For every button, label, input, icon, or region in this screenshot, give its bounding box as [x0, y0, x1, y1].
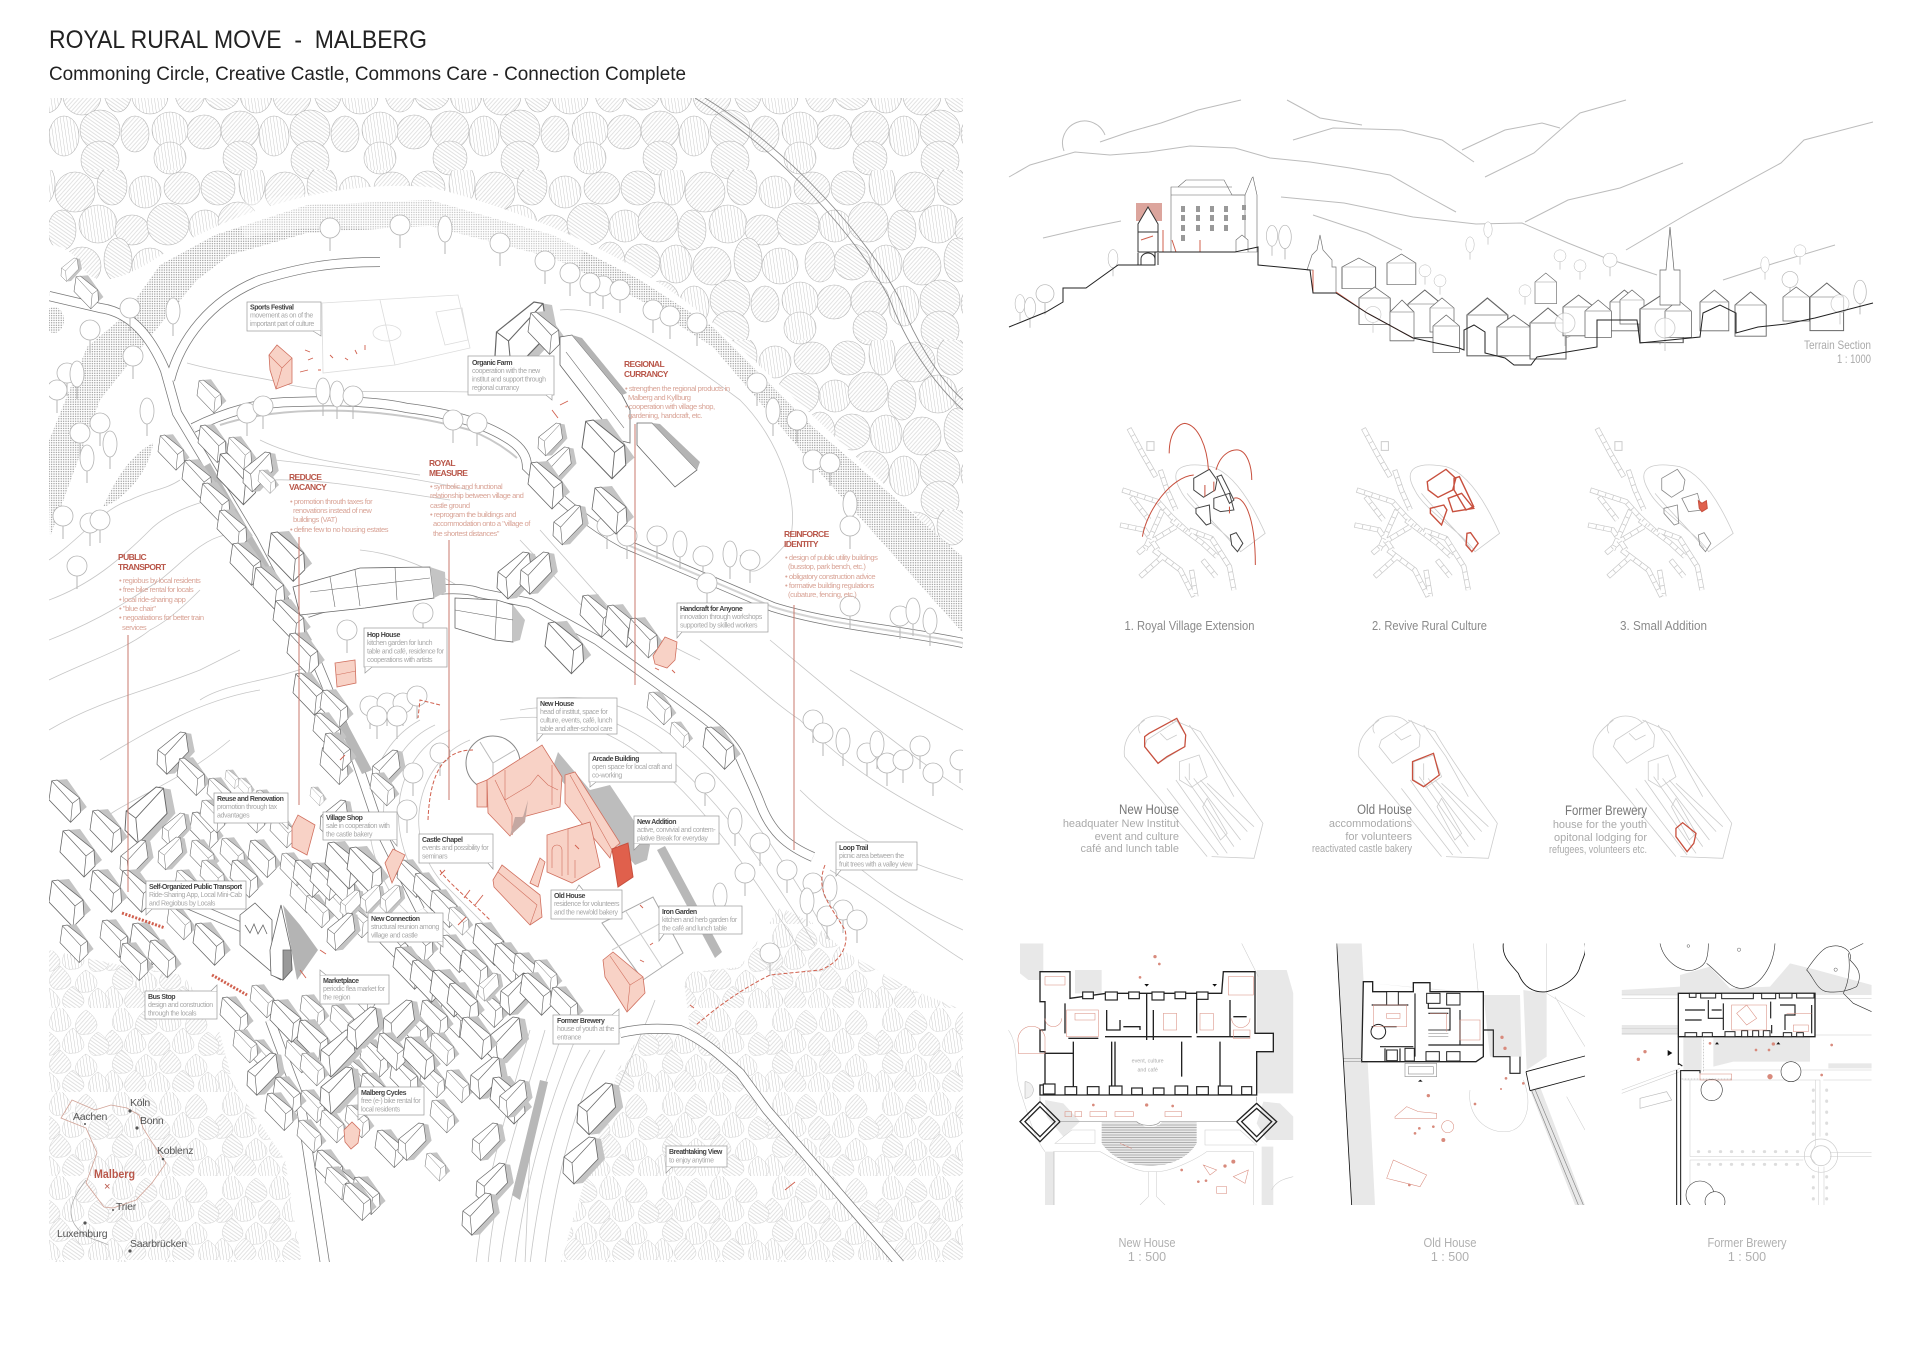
diagram 2: revive rural culture: [1354, 428, 1500, 597]
red leader lines: [128, 424, 794, 892]
strategy: royal measure: [429, 458, 531, 538]
callout: handcraft for anyone: innovation through workshops: [680, 614, 763, 621]
strategy: reinforce identity: • design of public utility buildings: [785, 553, 878, 562]
contour lines: [49, 310, 963, 1264]
title: ROYAL RURAL MOVE - MALBERG: [49, 26, 427, 54]
Hop House building: [335, 660, 356, 687]
callout: arcade building: [589, 753, 676, 787]
gate tower: [1307, 235, 1336, 293]
strategy: royal measure: • symbolic and functional: [430, 482, 503, 491]
callout: former brewery: entrance: [557, 1034, 582, 1042]
callout: new addition: [634, 816, 719, 850]
strategy: reduce vacancy: • promotion throuth taxes for: [290, 497, 373, 506]
red roof block and new house section: [1136, 203, 1200, 265]
callout: handcraft for anyone: Handcraft for Anyone: [680, 606, 743, 613]
callout: hop house: [364, 628, 447, 673]
panel: concept diagrams: [1063, 423, 1733, 858]
section tree overlays: [1365, 295, 1849, 351]
buildings: north meadow and upper village: [61, 258, 741, 769]
strategy: royal measure: relationship between village and: [430, 491, 524, 500]
callout: hop house: cooperations with artists: [367, 657, 433, 664]
callout: marketplace: periodic flea market for: [323, 986, 386, 993]
new house text: New House: [1119, 802, 1179, 817]
strategy: regional currancy: gardening, handcraft, etc.: [628, 411, 703, 420]
plan caption: old house: [1424, 1236, 1477, 1264]
callout: arcade building: Arcade Building: [592, 756, 639, 763]
old house text: accommodations: [1329, 818, 1412, 830]
plan caption: old house: Old House: [1424, 1236, 1477, 1250]
strategy: public transport: TRANSPORT: [118, 562, 167, 572]
callout: castle chapel: seminars: [422, 854, 448, 860]
red activity marks and trails: [300, 345, 795, 1190]
callout: former brewery: [553, 1009, 619, 1044]
plan caption: former brewery: Former Brewery: [1708, 1236, 1787, 1250]
roads: [49, 98, 963, 1264]
plan caption: new house: 1 : 500: [1128, 1250, 1166, 1264]
strategy: reduce vacancy: REDUCE: [289, 472, 322, 482]
callout: sports festival: movement as on of the: [250, 312, 313, 320]
callout: new addition: New Addition: [637, 819, 676, 826]
locator map: Trier: [116, 1201, 137, 1213]
locator map: Malberg: [94, 1169, 135, 1181]
strategy: royal measure: accommodation onto a "village of: [433, 519, 531, 528]
callout: marketplace: the region: [323, 994, 351, 1002]
Village Shop building: [292, 815, 315, 855]
New Addition: [612, 843, 633, 887]
callout: old house: [551, 885, 622, 919]
section caption: Terrain Section: [1804, 338, 1871, 352]
callout: new connection: village and castle: [371, 932, 418, 940]
section houses: [1342, 227, 1844, 359]
callout: malberg cycles: local residents: [361, 1106, 401, 1114]
callout: new house: culture, events, café, lunch: [540, 718, 613, 724]
new house text: headquater New Institut: [1063, 818, 1179, 830]
old house text: for volunteers: [1345, 831, 1412, 843]
callout: bus stop: through the locals: [148, 1010, 197, 1018]
strategy: reinforce identity: • formative building regulations: [785, 581, 874, 590]
callout: reuse and renovation: advantages: [217, 812, 250, 820]
strategy: reinforce identity: • obligatory construction advice: [785, 572, 875, 581]
callout: organic farm: cooperation with the new: [472, 368, 541, 375]
connector wing: [530, 858, 545, 887]
callout: village shop: Village Shop: [326, 815, 363, 822]
locator map: Bonn: [140, 1115, 164, 1127]
callout: breathtaking view: [666, 1146, 727, 1173]
plan: former brewery: [1622, 943, 1872, 1212]
panel: isometric site map: [44, 98, 970, 1264]
callout: self-organized public transport: Self-Organized Public Transport: [149, 884, 243, 891]
callout: marketplace: Marketplace: [323, 978, 359, 985]
callout: organic farm: Organic Farm: [472, 360, 512, 367]
old house text: Old House: [1357, 802, 1412, 817]
diagram 1: royal village extension: [1120, 423, 1265, 597]
plan: new house: [1008, 943, 1293, 1205]
strategy: public transport: • free bike rental for locals: [119, 585, 194, 594]
castle red buildings: [269, 345, 677, 1149]
plan: new house: event, culture: [1132, 1059, 1164, 1065]
Sports Festival building: [269, 345, 292, 389]
callout: iron garden: Iron Garden: [662, 909, 697, 916]
former brewery text: opitonal lodging for: [1554, 832, 1647, 844]
callout: new house: [537, 698, 617, 741]
plan caption: old house: 1 : 500: [1431, 1250, 1469, 1264]
callout: sports festival: important part of culture: [250, 321, 314, 328]
old house text: reactivated castle bakery: [1312, 843, 1412, 855]
callout: arcade building: co-working: [592, 772, 622, 780]
callout: sports festival: [247, 302, 321, 336]
callout: arcade building: open space for local craft and: [592, 764, 672, 771]
panel: terrain section: [1009, 100, 1873, 366]
diagram 2 caption: 2. Revive Rural Culture: [1372, 619, 1487, 633]
river band: [44, 200, 963, 633]
callout: castle chapel: events and possibility for: [422, 845, 489, 852]
plan caption: new house: [1118, 1236, 1176, 1264]
callout: new house: head of institut, space for: [540, 709, 608, 716]
strategy: royal measure: ROYAL: [429, 458, 455, 468]
callout: old house: Old House: [554, 893, 586, 900]
callout: hop house: table and café, residence for: [367, 648, 445, 656]
callout: new addition: plative Break for everyday: [637, 836, 708, 842]
strategy: reduce vacancy: • define few to no housing estates: [290, 525, 389, 534]
diagram 3: small addition: [1588, 428, 1733, 597]
strategy: reduce vacancy: renovations instead of new: [293, 506, 372, 515]
callout: marketplace: [320, 970, 389, 1004]
hills: [1009, 100, 1873, 280]
strategy: reduce vacancy: [289, 472, 389, 534]
callout: malberg cycles: Malberg Cycles: [361, 1090, 407, 1097]
callout: organic farm: regional currancy: [472, 385, 520, 392]
New House building: [477, 745, 562, 836]
strategy: reinforce identity: IDENTITY: [784, 539, 819, 549]
strategy: public transport: • regiobus by local residents: [119, 576, 201, 585]
callout: old house: residence for volunteers: [554, 901, 620, 908]
callout: organic farm: institut and support through: [472, 376, 546, 384]
red access stairs: [1313, 270, 1413, 338]
callout: new connection: New Connection: [371, 916, 420, 923]
former brewery text: [1549, 803, 1647, 856]
callout: hop house: kitchen garden for lunch: [367, 640, 433, 647]
new house plan red furnishings: [1018, 977, 1253, 1193]
strategy: reduce vacancy: buildings (VAT): [293, 515, 338, 524]
callout: old house: and the new/old bakery: [554, 910, 618, 916]
section caption: [1804, 338, 1871, 366]
callout: new house: New House: [540, 701, 574, 708]
strategy: regional currancy: CURRANCY: [624, 369, 669, 379]
strategy: public transport: services: [122, 623, 147, 632]
callout: sports festival: Sports Festival: [250, 304, 294, 312]
Arcade Building: [565, 772, 620, 858]
callout: iron garden: [659, 906, 742, 941]
locator map: Koblenz: [157, 1145, 193, 1157]
new house text: event and culture: [1095, 831, 1179, 843]
Old House building: [547, 822, 600, 883]
buildings: village: [49, 689, 623, 1235]
diagram: new house: [1063, 716, 1263, 858]
sports field: [322, 295, 470, 373]
church: [240, 903, 318, 980]
diagram 1 caption: 1. Royal Village Extension: [1124, 619, 1255, 633]
castle terrace and iron garden: [466, 736, 683, 980]
callout: organic farm: [468, 356, 554, 400]
subtitle: Commoning Circle, Creative Castle, Commons Care - Connection Complete: [49, 64, 686, 85]
callout: iron garden: the café and lunch table: [662, 926, 727, 932]
strategy: reinforce identity: REINFORCE: [784, 529, 830, 539]
callout: self-organized public transport: Ride-Sharing App, Local Mini-Cab: [149, 892, 242, 899]
callout: breathtaking view: Breathtaking View: [669, 1149, 723, 1156]
ground line: [1009, 247, 1873, 365]
Malberg Cycles building: [344, 1122, 360, 1149]
Former Brewery building: [603, 952, 645, 1012]
strategy: public transport: • "blue chair": [119, 604, 156, 613]
strategy: regional currancy: REGIONAL: [624, 359, 664, 369]
diagram: former brewery: [1549, 716, 1732, 858]
section caption: 1 : 1000: [1837, 352, 1871, 366]
strategy: public transport: [118, 552, 204, 632]
strategy: reinforce identity: [784, 529, 878, 599]
panel: floor plans: [1008, 943, 1872, 1264]
strategy: reduce vacancy: VACANCY: [289, 482, 327, 492]
new house text: [1063, 802, 1179, 855]
callout: castle chapel: [419, 834, 493, 869]
callout: bus stop: Bus Stop: [148, 994, 175, 1001]
plan caption: former brewery: 1 : 500: [1728, 1250, 1766, 1264]
callout: handcraft for anyone: supported by skilled workers: [680, 622, 758, 630]
strategy: public transport: PUBLIC: [118, 552, 147, 562]
strategy: regional currancy: • cooperation with village shop,: [625, 402, 715, 411]
plan caption: new house: New House: [1118, 1236, 1176, 1250]
strategy: royal measure: • reprogram the buildings and: [430, 510, 516, 519]
callout: iron garden: kitchen and herb garden for: [662, 917, 738, 924]
strategy: royal measure: MEASURE: [429, 468, 468, 478]
callout: breathtaking view: to enjoy anytime: [669, 1158, 714, 1164]
plan: new house: and café: [1137, 1067, 1158, 1073]
former brewery text: refugees, volunteers etc.: [1549, 844, 1647, 856]
locator map: ×: [104, 1181, 110, 1193]
callout: reuse and renovation: Reuse and Renovation: [217, 796, 284, 803]
locator map: Aachen: [73, 1111, 108, 1123]
callout: handcraft for anyone: [677, 603, 768, 638]
former brewery text: Former Brewery: [1565, 803, 1647, 818]
callout: castle chapel: Castle Chapel: [422, 837, 463, 844]
callout: bus stop: design and construction: [148, 1002, 213, 1009]
castle elevation: [1171, 177, 1257, 252]
amphitheatre steps: [1102, 1123, 1197, 1166]
callout: former brewery: Former Brewery: [557, 1018, 605, 1025]
strategy: royal measure: the shortest distances": [433, 529, 500, 538]
old house text: [1312, 802, 1412, 855]
callout: new connection: [368, 913, 443, 947]
callout: bus stop: [145, 985, 217, 1019]
callout: former brewery: house of youth at the: [557, 1026, 614, 1033]
plan caption: former brewery: [1708, 1236, 1787, 1264]
callout: self-organized public transport: [146, 881, 246, 915]
callout: village shop: [323, 812, 397, 846]
former brewery text: house for the youth: [1553, 819, 1647, 831]
callout: village shop: the castle bakery: [326, 832, 373, 838]
callout: self-organized public transport: and Regiobus by Locals: [149, 900, 216, 908]
callout: new house: table and after-school care: [540, 726, 613, 733]
callout: new addition: active, convivial and contem-: [637, 827, 716, 834]
long chapel hall: [493, 865, 542, 925]
callout: loop trail: [836, 842, 917, 876]
callout: loop trail: picnic area between the: [839, 853, 904, 860]
strategy: regional currancy: Malberg and Kyllburg: [628, 393, 691, 402]
forest areas: [49, 98, 963, 1264]
locator map: [57, 1097, 193, 1253]
diagram 3 caption: 3. Small Addition: [1620, 619, 1707, 633]
strategy: public transport: • local ride-sharing app: [119, 595, 186, 604]
plan: old house: [1337, 943, 1585, 1205]
callout: loop trail: fruit trees with a valley view: [839, 862, 914, 868]
strategy: regional currancy: [624, 359, 730, 420]
new house text: café and lunch table: [1081, 843, 1179, 855]
callout: malberg cycles: free (e-) bike rental for: [361, 1098, 421, 1105]
locator map: Köln: [130, 1097, 150, 1109]
callout: reuse and renovation: [214, 793, 288, 829]
callout: village shop: sale in cooperation with: [326, 823, 390, 830]
strategy: reinforce identity: (cubature, fencing, etc.): [788, 590, 857, 599]
locator map: Saarbrücken: [130, 1238, 187, 1250]
section trees: [1015, 222, 1866, 349]
callout: new connection: structural reunion among: [371, 924, 439, 931]
diagram: old house: [1312, 716, 1497, 858]
street shadow strip: [203, 463, 722, 1200]
callout: reuse and renovation: promotion through tax: [217, 804, 278, 811]
callout: loop trail: Loop Trail: [839, 845, 868, 852]
strategy: reinforce identity: (busstop, park bench, etc.): [788, 562, 866, 571]
trees: [47, 215, 970, 976]
strategy: regional currancy: • strengthen the regional products in: [625, 384, 730, 393]
Castle Chapel building: [385, 849, 405, 883]
callout: malberg cycles: [358, 1087, 424, 1120]
strategy: public transport: • negoatiations for better train: [119, 613, 204, 622]
locator map: Luxemburg: [57, 1228, 108, 1240]
Handcraft building: [653, 637, 677, 668]
strategy: royal measure: castle ground: [430, 501, 470, 510]
callout: hop house: Hop House: [367, 632, 400, 639]
